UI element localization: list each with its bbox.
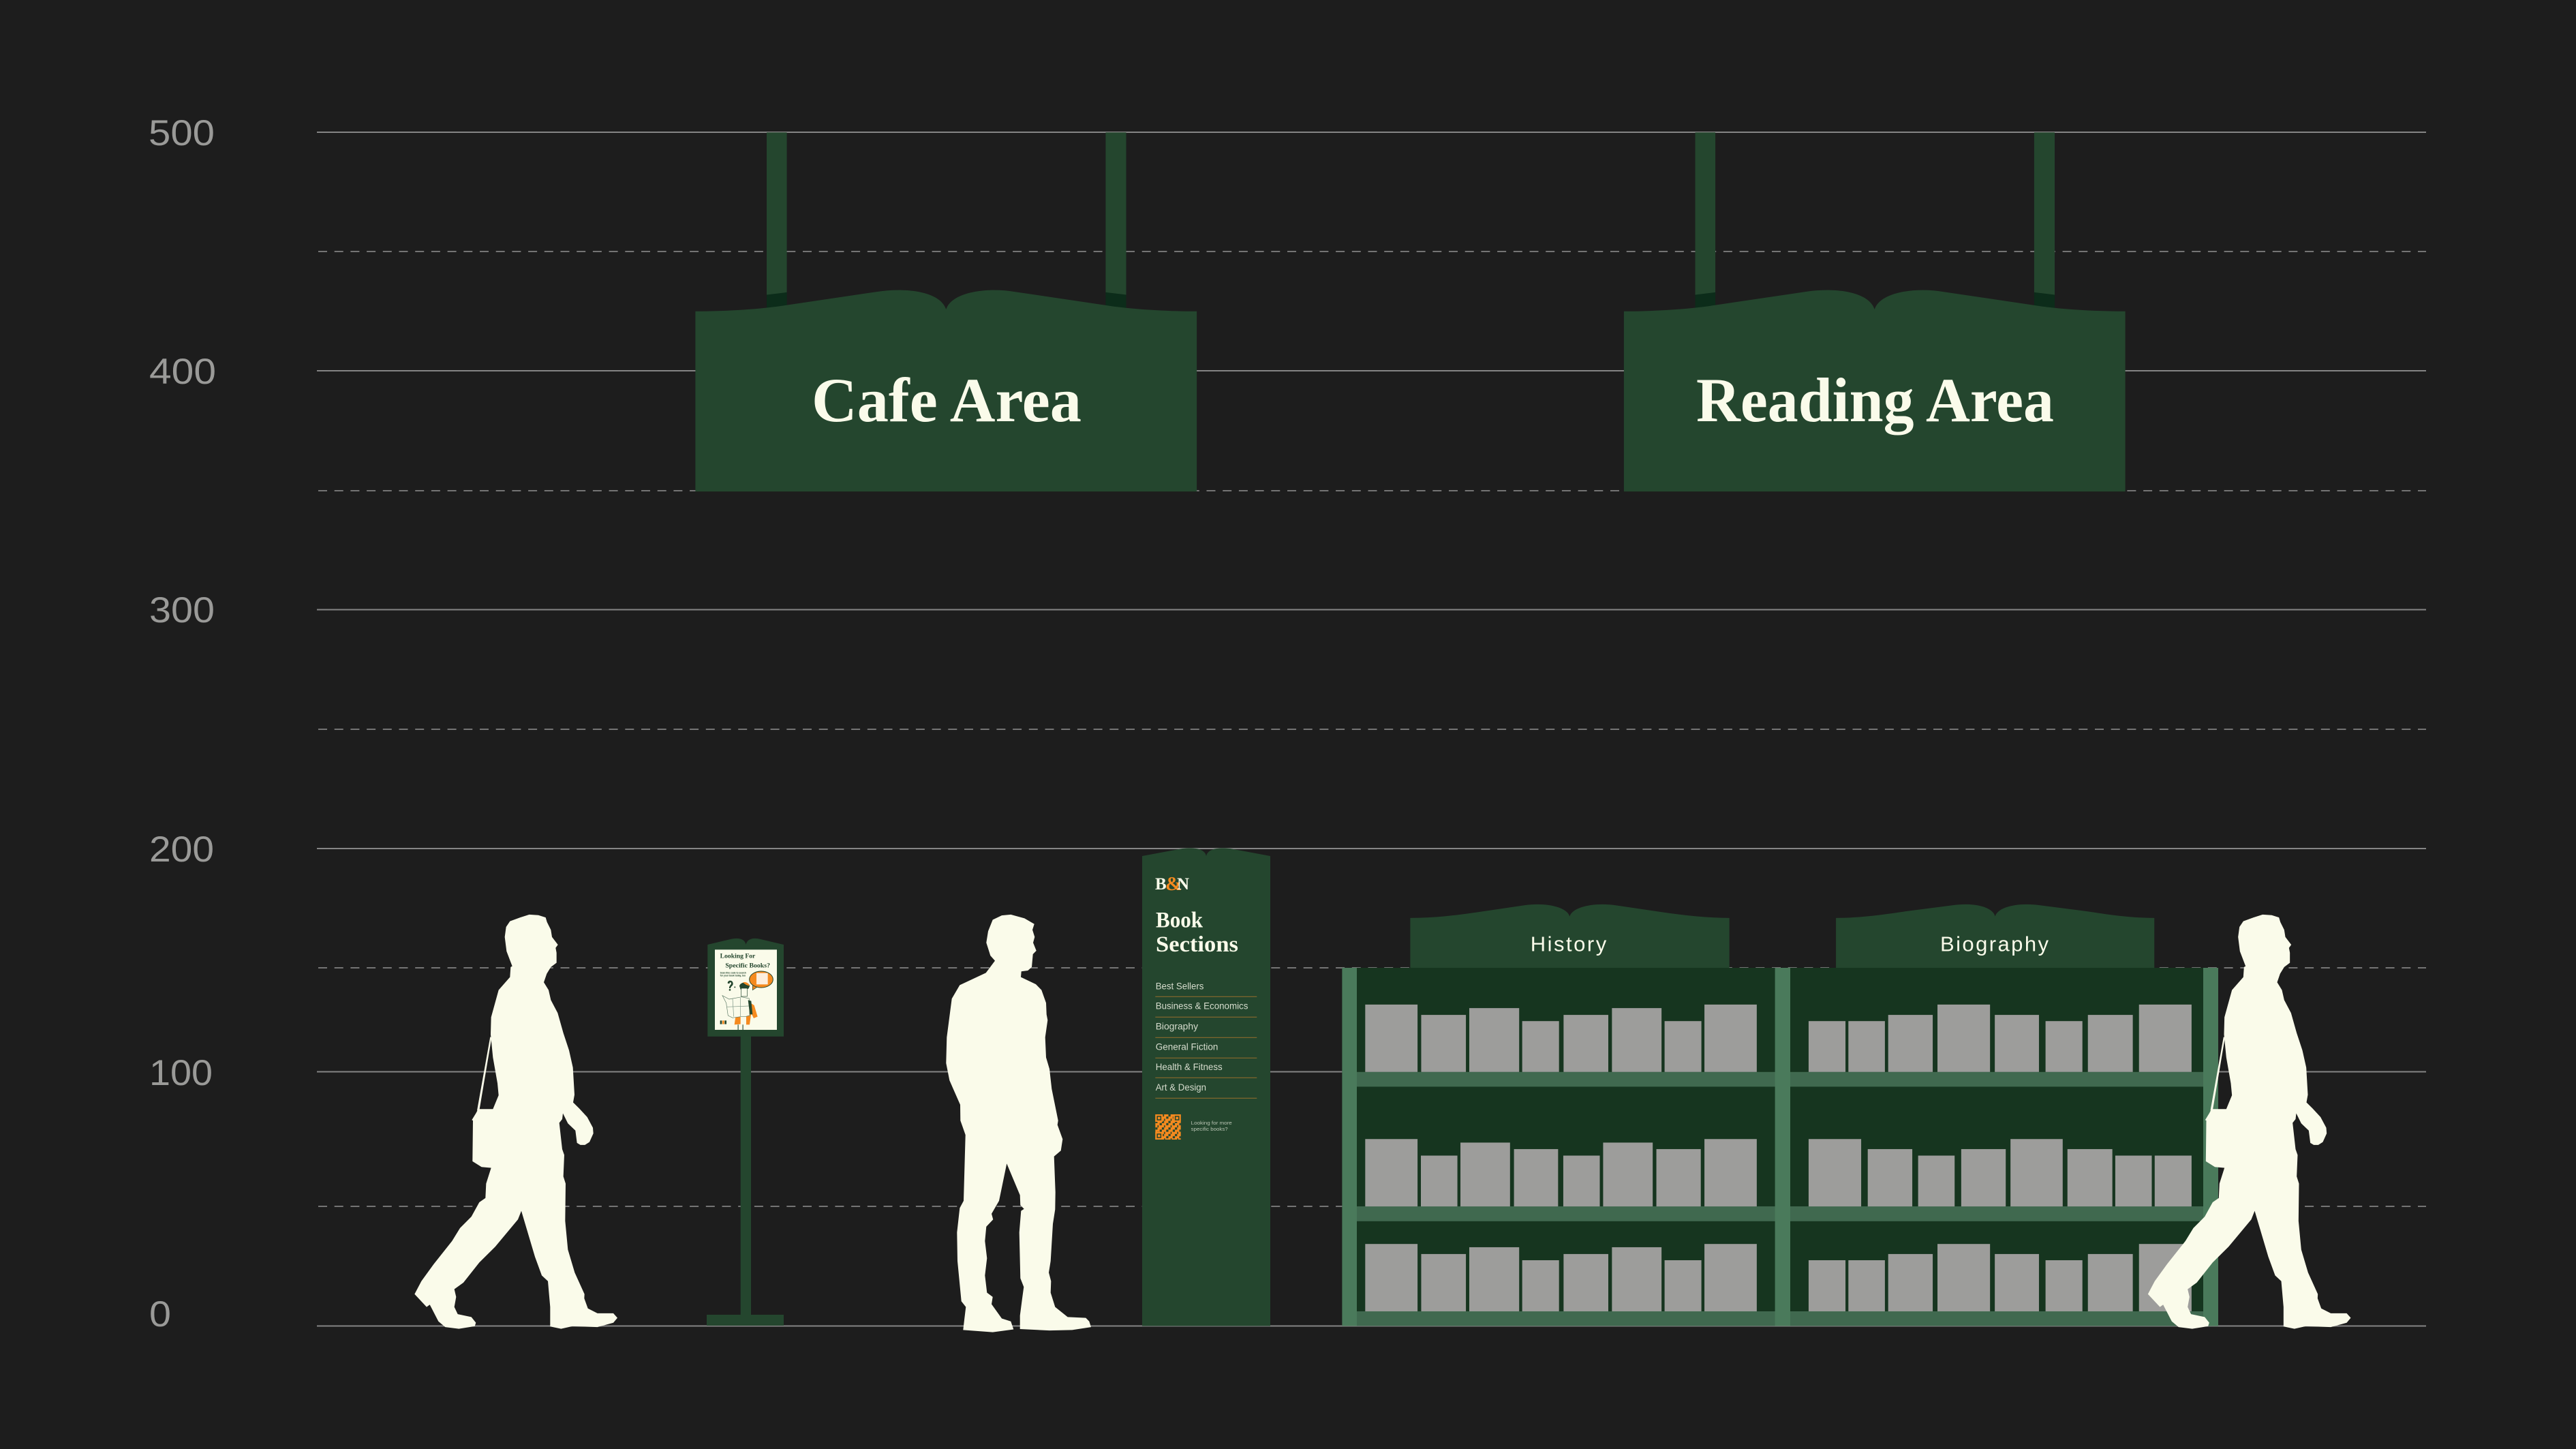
sign board — [695, 290, 1197, 491]
poster artwork: Looking For — [720, 953, 755, 960]
QR caption: specific books? — [1191, 1127, 1228, 1132]
poster artwork — [715, 949, 777, 1030]
axis label 400: 400 — [149, 352, 216, 392]
sign text: Cafe Area — [812, 365, 1082, 435]
section list: General Fiction — [1156, 1041, 1218, 1052]
hanging sign: Reading Area — [1624, 132, 2126, 491]
heading: Sections — [1156, 932, 1238, 957]
section list: Art & Design — [1156, 1082, 1206, 1093]
shelf header: History — [1410, 904, 1730, 968]
logo: B — [1155, 875, 1167, 894]
person 3: walking silhouette with bag — [2148, 915, 2350, 1329]
shelf header: Biography: Biography — [1940, 932, 2049, 956]
y-axis labels — [149, 113, 216, 1334]
QR caption — [1191, 1121, 1232, 1132]
person 2: standing silhouette — [946, 915, 1091, 1332]
stand frame — [707, 939, 784, 1037]
QR caption: Looking for more — [1191, 1121, 1232, 1126]
directory sign: Book Sections — [1142, 848, 1270, 1326]
heading — [1156, 909, 1238, 957]
shelf back panel — [1342, 968, 2218, 1326]
bookshelf — [1342, 904, 2218, 1326]
person 1: walking silhouette with bag — [414, 915, 617, 1329]
heading: Book — [1156, 909, 1203, 933]
section list: Biography — [1156, 1021, 1198, 1032]
section list — [1156, 981, 1248, 1093]
sign body — [1142, 848, 1270, 1326]
shelf boards — [1357, 1072, 2203, 1326]
logo — [1155, 873, 1189, 895]
books: left bay — [1365, 1005, 1757, 1311]
section list: Health & Fitness — [1156, 1061, 1223, 1072]
poster artwork: Scan this code to search — [720, 971, 746, 974]
axis label 100: 100 — [149, 1053, 213, 1093]
sign hangers — [695, 132, 1197, 491]
shelf header: History: History — [1531, 932, 1607, 956]
logo: N — [1177, 875, 1189, 894]
axis label 200: 200 — [149, 829, 214, 870]
sign hangers — [1624, 132, 2126, 491]
axis label 0: 0 — [149, 1294, 171, 1334]
sign text: Reading Area — [1696, 365, 2054, 435]
poster artwork: Specific Books? — [725, 962, 770, 968]
section list: Business & Economics — [1156, 1001, 1248, 1011]
section list: Best Sellers — [1156, 981, 1203, 992]
shelf header: Biography — [1836, 904, 2154, 968]
sign board — [1624, 290, 2126, 491]
axis label 300: 300 — [149, 590, 215, 630]
QR code — [1155, 1114, 1181, 1140]
axis label 500: 500 — [149, 113, 215, 153]
books: right bay — [1809, 1005, 2192, 1311]
shelf posts — [1342, 968, 2218, 1326]
stand pole and base — [707, 1033, 784, 1326]
poster stand sign — [707, 939, 784, 1326]
logo: & — [1165, 873, 1182, 895]
hanging sign: Cafe Area — [695, 132, 1197, 491]
poster artwork: for your book today, too — [720, 975, 746, 977]
